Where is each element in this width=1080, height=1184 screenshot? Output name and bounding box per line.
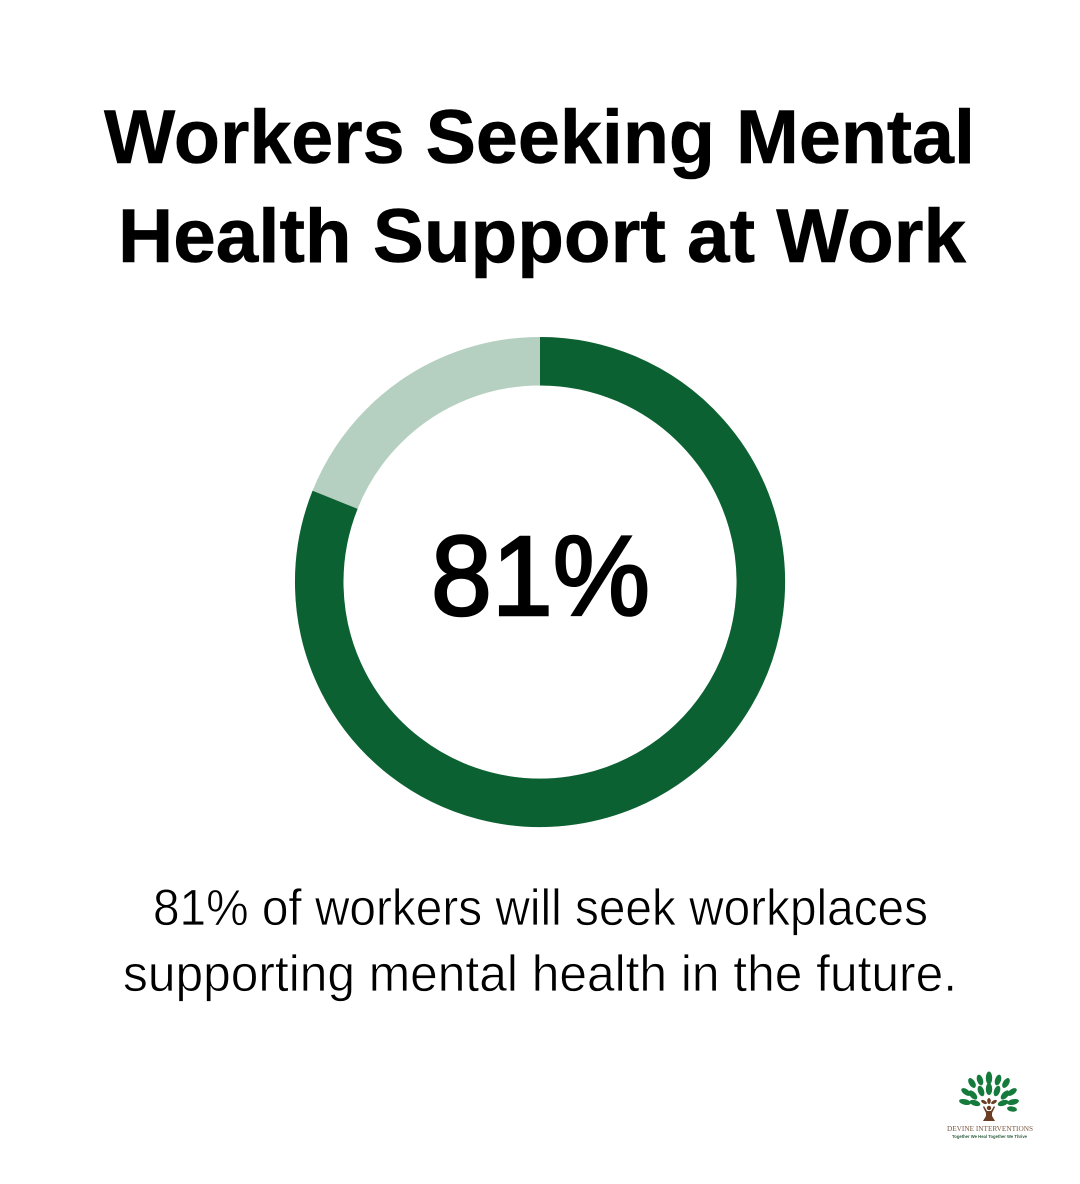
logo name: DEVINE INTERVENTIONS: [947, 1124, 1033, 1133]
caption: supporting mental health in the future.: [123, 945, 957, 1002]
icon: tree: [959, 1072, 1019, 1112]
highlighted 81% segment: [319, 361, 761, 803]
donut chart: 81%: [319, 361, 761, 803]
title: Health Support at Work: [118, 194, 967, 279]
big percentage: 81%: [431, 513, 650, 639]
logo: Devine Interventions: [947, 1072, 1033, 1140]
logo tagline: Together We Heal Together We Thrive: [952, 1134, 1027, 1140]
caption: [123, 879, 957, 1002]
remaining 19% segment: [319, 361, 761, 803]
title: Workers Seeking Mental: [104, 95, 975, 180]
title: [104, 95, 975, 279]
icon: trunk figure: [980, 1098, 998, 1121]
caption: 81% of workers will seek workplaces: [153, 879, 928, 936]
